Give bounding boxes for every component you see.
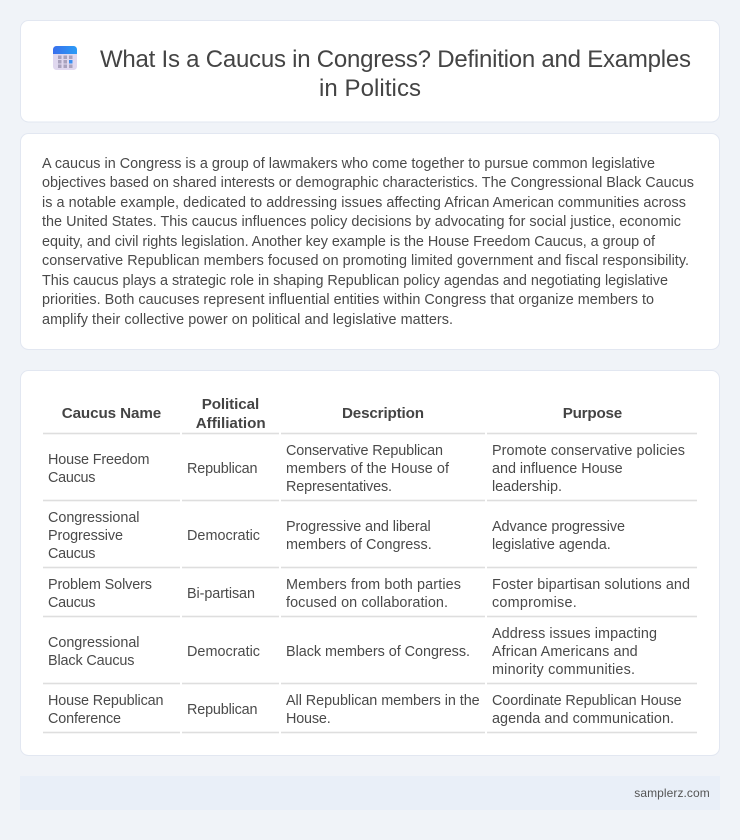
panel: caucus table <box>20 370 720 756</box>
table row: Congressional Progressive Caucus <box>43 510 697 568</box>
text block: caucus definition paragraph <box>42 156 694 328</box>
table row: House Republican Conference: Conference <box>48 711 121 727</box>
table row: House Republican Conference: agenda and communication. <box>492 711 674 727</box>
table row: House Freedom Caucus: and influence House <box>492 461 623 477</box>
table row: Congressional Black Caucus: minority communities. <box>492 662 635 678</box>
text block: caucus definition paragraph: the United States. This caucus influences policy decisions by advocating for social justice, economic <box>42 214 681 230</box>
table row: Problem Solvers Caucus: Problem Solvers <box>48 577 152 593</box>
table row: House Republican Conference: Republican <box>187 702 258 718</box>
text block: caucus definition paragraph: is a notable example, dedicated to addressing issues affecting African American communities across <box>42 195 686 211</box>
table row: House Republican Conference: House Republican <box>48 693 164 709</box>
table header row: Caucus Name <box>62 405 161 422</box>
table row: House Republican Conference <box>43 693 697 733</box>
table row: Congressional Progressive Caucus: legislative agenda. <box>492 537 611 553</box>
table header row: Political <box>202 396 259 413</box>
table row: House Republican Conference: All Republican members in the <box>286 693 480 709</box>
table row: Congressional Progressive Caucus: Advance progressive <box>492 519 625 535</box>
table row: House Freedom Caucus: Conservative Republican <box>286 443 443 459</box>
table row: House Freedom Caucus <box>43 443 697 501</box>
panel: introduction <box>20 134 720 350</box>
table row: Congressional Progressive Caucus: Congressional <box>48 510 140 526</box>
footer <box>20 776 720 810</box>
table row: House Freedom Caucus: Representatives. <box>286 479 392 495</box>
table row: Congressional Black Caucus: Congressional <box>48 635 140 651</box>
text block: caucus definition paragraph: A caucus in Congress is a group of lawmakers who come together to pursue common legislative <box>42 156 655 172</box>
table header row: Purpose <box>563 405 622 422</box>
table header row: Description <box>342 405 424 422</box>
text block: caucus definition paragraph: equity, and civil rights legislation. Another key example is the House Freedom Caucus, a group of <box>42 234 656 250</box>
table row: Congressional Progressive Caucus: members of Congress. <box>286 537 432 553</box>
title: in Politics <box>319 75 421 102</box>
table row: Congressional Progressive Caucus: Progressive and liberal <box>286 519 431 535</box>
text block: caucus definition paragraph: priorities. Both caucuses represent influential entities within Congress that organize members to <box>42 292 654 308</box>
text block: caucus definition paragraph: This caucus plays a strategic role in shaping Republican policy agendas and negotiating legislative <box>42 273 668 289</box>
footer: samplerz.com <box>634 786 710 800</box>
table row: Congressional Black Caucus: Black Caucus <box>48 653 134 669</box>
table row: Congressional Progressive Caucus: Progressive <box>48 528 123 544</box>
text block: caucus definition paragraph: objectives based on shared interests or demographic characteristics. The Congressional Black Caucus <box>42 175 694 191</box>
title <box>100 46 691 102</box>
table row: Congressional Black Caucus <box>43 626 697 684</box>
table row: Congressional Black Caucus: Address issues impacting <box>492 626 657 642</box>
table row: House Republican Conference: House. <box>286 711 331 727</box>
text block: caucus definition paragraph: conservative Republican members focused on promoting limited government and fiscal responsibility. <box>42 253 689 269</box>
table row: Problem Solvers Caucus: Members from both parties <box>286 577 461 593</box>
table row: Congressional Black Caucus: Democratic <box>187 644 260 660</box>
table row: House Freedom Caucus: Republican <box>187 461 258 477</box>
table row: Problem Solvers Caucus: compromise. <box>492 595 577 611</box>
table row: Congressional Progressive Caucus: Democratic <box>187 528 260 544</box>
table row: Problem Solvers Caucus: focused on collaboration. <box>286 595 448 611</box>
table row: Congressional Black Caucus: Black members of Congress. <box>286 644 470 660</box>
table row: Problem Solvers Caucus: Bi-partisan <box>187 586 255 602</box>
table row: House Freedom Caucus: Promote conservative policies <box>492 443 685 459</box>
table header row: Affiliation <box>196 415 266 432</box>
table row: Congressional Progressive Caucus: Caucus <box>48 546 96 562</box>
icon: calendar <box>53 46 77 70</box>
table row: Problem Solvers Caucus: Caucus <box>48 595 96 611</box>
table row: House Freedom Caucus: leadership. <box>492 479 562 495</box>
text block: caucus definition paragraph: amplify their collective power on political and legislative matters. <box>42 312 453 328</box>
table row: Congressional Black Caucus: African Americans and <box>492 644 638 660</box>
table row: Problem Solvers Caucus <box>43 577 697 617</box>
table row: House Freedom Caucus: House Freedom <box>48 452 150 468</box>
table row: House Freedom Caucus: Caucus <box>48 470 96 486</box>
table row: House Republican Conference: Coordinate Republican House <box>492 693 682 709</box>
table header row <box>43 396 697 434</box>
title: What Is a Caucus in Congress? Definition and Examples <box>100 46 691 73</box>
table row: House Freedom Caucus: members of the House of <box>286 461 450 477</box>
panel: title card <box>20 20 720 122</box>
table row: Problem Solvers Caucus: Foster bipartisan solutions and <box>492 577 690 593</box>
